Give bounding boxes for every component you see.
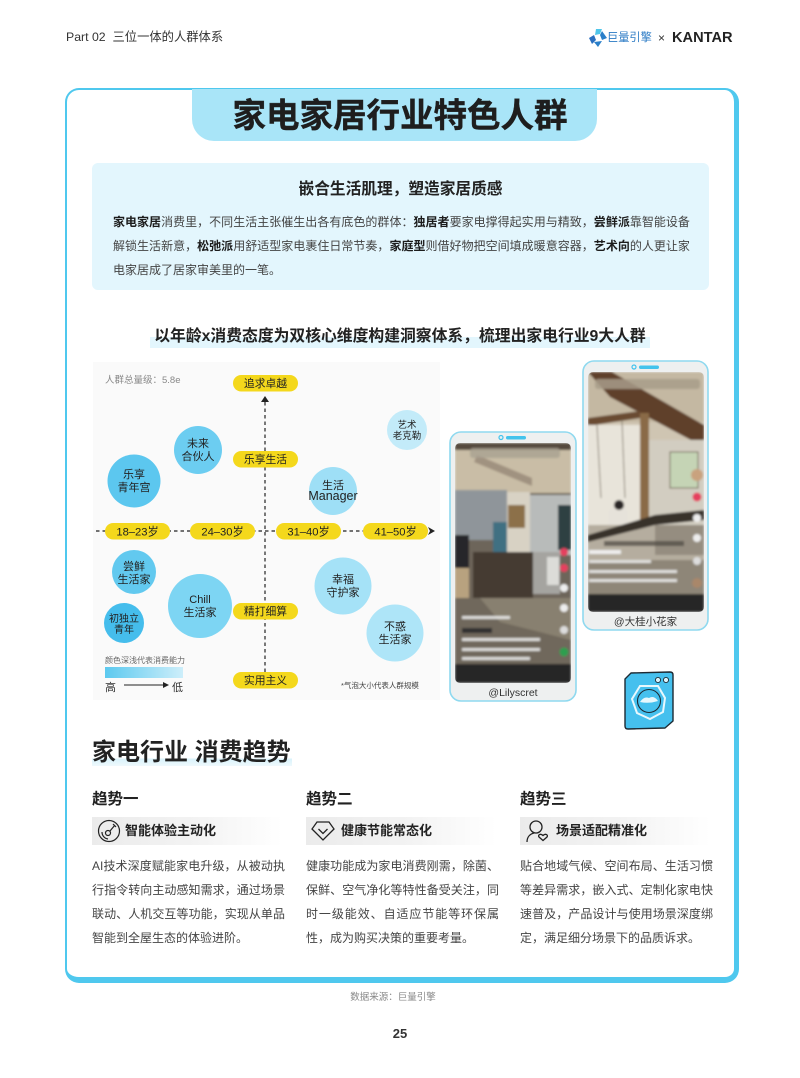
title tab — [192, 89, 597, 141]
intro text: 解锁生活新意，松弛派用舒适型家电裹住日常节奏，家庭型则借好物把空间填成暖意容器，艺术向的人更让家 — [113, 239, 690, 253]
icon: ocean engine logo — [589, 29, 607, 47]
bubbles: 青年 — [114, 623, 134, 636]
bubbles: 生活家 — [118, 572, 150, 586]
bubbles: 老克勒 — [393, 430, 421, 442]
bubbles: 生活家 — [378, 632, 412, 646]
intro text: 家电家居消费里，不同生活主张催生出各有底色的群体：独居者要家电撑得起实用与精致，尝鲜派靠智能设备 — [113, 215, 690, 229]
trend text: 等差异需求，嵌入式、定制化家电快 — [520, 883, 713, 897]
trend heading: 趋势三 — [520, 791, 567, 808]
age pills: 18–23岁 — [116, 524, 159, 538]
age pills: 41–50岁 — [374, 524, 417, 538]
panel: trend one — [92, 790, 285, 945]
panel: intro box — [92, 163, 709, 290]
attitude pills — [233, 375, 298, 688]
logo text: 巨量引擎 — [607, 32, 652, 44]
bubbles: 生活 — [322, 478, 344, 492]
bubbles: 不惑 — [384, 619, 406, 633]
video still: living room — [455, 443, 571, 683]
bubbles: 合伙人 — [182, 449, 214, 463]
panel: trend two — [306, 790, 499, 945]
trend text: 时一级能效、自适应节能等环保属 — [306, 907, 499, 921]
trend text: 健康功能成为家电消费刚需，除菌、 — [306, 859, 499, 873]
bubbles: 生活家 — [184, 605, 216, 619]
trend heading: 趋势二 — [306, 791, 353, 808]
phone mockup: @大桂小花家 — [582, 360, 709, 631]
trend heading: 趋势一 — [92, 791, 139, 808]
bubbles: 幸福 — [332, 572, 354, 586]
intro text: 电家居成了居家审美里的一笔。 — [113, 263, 281, 277]
trend title bar with icon — [306, 817, 496, 845]
subtitle with highlight: 以年龄x消费态度为双核心维度构建洞察体系，梳理出家电行业9大人群 — [154, 328, 646, 345]
section heading with highlight: 家电行业 消费趋势 — [92, 739, 291, 766]
legend: 低 — [172, 681, 183, 694]
footnote: *气泡大小代表人群规模 — [341, 680, 419, 690]
trend text: 智能到全屋生态的体验进阶。 — [92, 931, 248, 945]
bubble chart: age x consumption attitude: 人群总量级：5.8e — [105, 374, 180, 386]
bubbles: 乐享 — [123, 467, 145, 481]
main panel frame — [65, 88, 739, 983]
legend: 高 — [105, 680, 116, 694]
trend text — [306, 859, 499, 945]
bubbles: 未来 — [187, 437, 209, 450]
panel: trend three — [520, 790, 713, 945]
trend text — [92, 859, 285, 945]
bubble chart: age x consumption attitude — [96, 374, 435, 694]
bubbles: 艺术 — [397, 419, 417, 431]
age pills: 24–30岁 — [201, 524, 244, 538]
attitude pills: 精打细算 — [244, 604, 287, 618]
bubbles: Chill — [189, 594, 211, 606]
bubbles: 初独立 — [109, 612, 139, 625]
age pills: 31–40岁 — [287, 524, 330, 538]
intro text — [113, 215, 690, 277]
trend text: 贴合地域气候、空间布局、生活习惯 — [520, 859, 713, 873]
bubbles: Manager — [308, 489, 358, 503]
title text: 家电家居行业特色人群 — [232, 98, 568, 135]
attitude pills: 追求卓越 — [244, 376, 287, 390]
header: section label: Part 02 三位一体的人群体系 — [66, 30, 223, 44]
Kantar wordmark: KANTAR — [672, 30, 733, 46]
trend text: 保鲜、空气净化等特性备受关注，同 — [306, 883, 499, 897]
video still: swing room — [588, 372, 704, 612]
phone mockup: @大桂小花家: @大桂小花家 — [614, 615, 678, 628]
intro heading: 嵌合生活肌理，塑造家居质感 — [299, 181, 502, 198]
trend text: 行指令转向主动感知需求，通过场景 — [92, 883, 285, 897]
icon: diamond check — [311, 821, 335, 841]
trend title bar with icon — [520, 817, 710, 845]
trend title: 场景适配精准化 — [556, 823, 647, 838]
bubbles — [104, 410, 427, 662]
header: logos — [589, 29, 733, 47]
trend text: 定，满足细分场景下的品质诉求。 — [520, 931, 700, 945]
trend title: 智能体验主动化 — [125, 823, 216, 838]
cross mark: × — [658, 31, 665, 45]
trend title: 健康节能常态化 — [341, 823, 432, 838]
legend: 颜色深浅代表消费能力 — [105, 655, 185, 665]
attitude pills: 实用主义 — [244, 673, 287, 687]
trend text — [520, 859, 713, 945]
legend — [105, 655, 185, 694]
bubbles: 青年宫 — [118, 480, 150, 494]
icon: smart disc — [98, 820, 120, 842]
age pills — [105, 523, 428, 540]
trend title bar with icon — [92, 817, 282, 845]
phone mockup: @Lilyscret — [449, 431, 577, 702]
bubbles: 尝鲜 — [123, 559, 145, 573]
icon: washing machine — [624, 671, 674, 730]
trend text: AI技术深度赋能家电升级，从被动执 — [92, 859, 285, 873]
icon: person with heart — [526, 820, 548, 842]
phone mockup: @Lilyscret: @Lilyscret — [488, 687, 538, 699]
axes — [96, 396, 435, 672]
bubbles: 守护家 — [326, 585, 360, 599]
trend text: 速普及，产品设计与使用场景深度绑 — [520, 907, 713, 921]
trend text: 性，成为购买决策的重要考量。 — [306, 931, 474, 945]
attitude pills: 乐享生活 — [244, 452, 287, 466]
page number: 25 — [393, 1026, 407, 1041]
data source: 数据来源：巨量引擎 — [350, 992, 436, 1003]
trend text: 联动、人机交互等功能，实现从单品 — [92, 907, 285, 921]
